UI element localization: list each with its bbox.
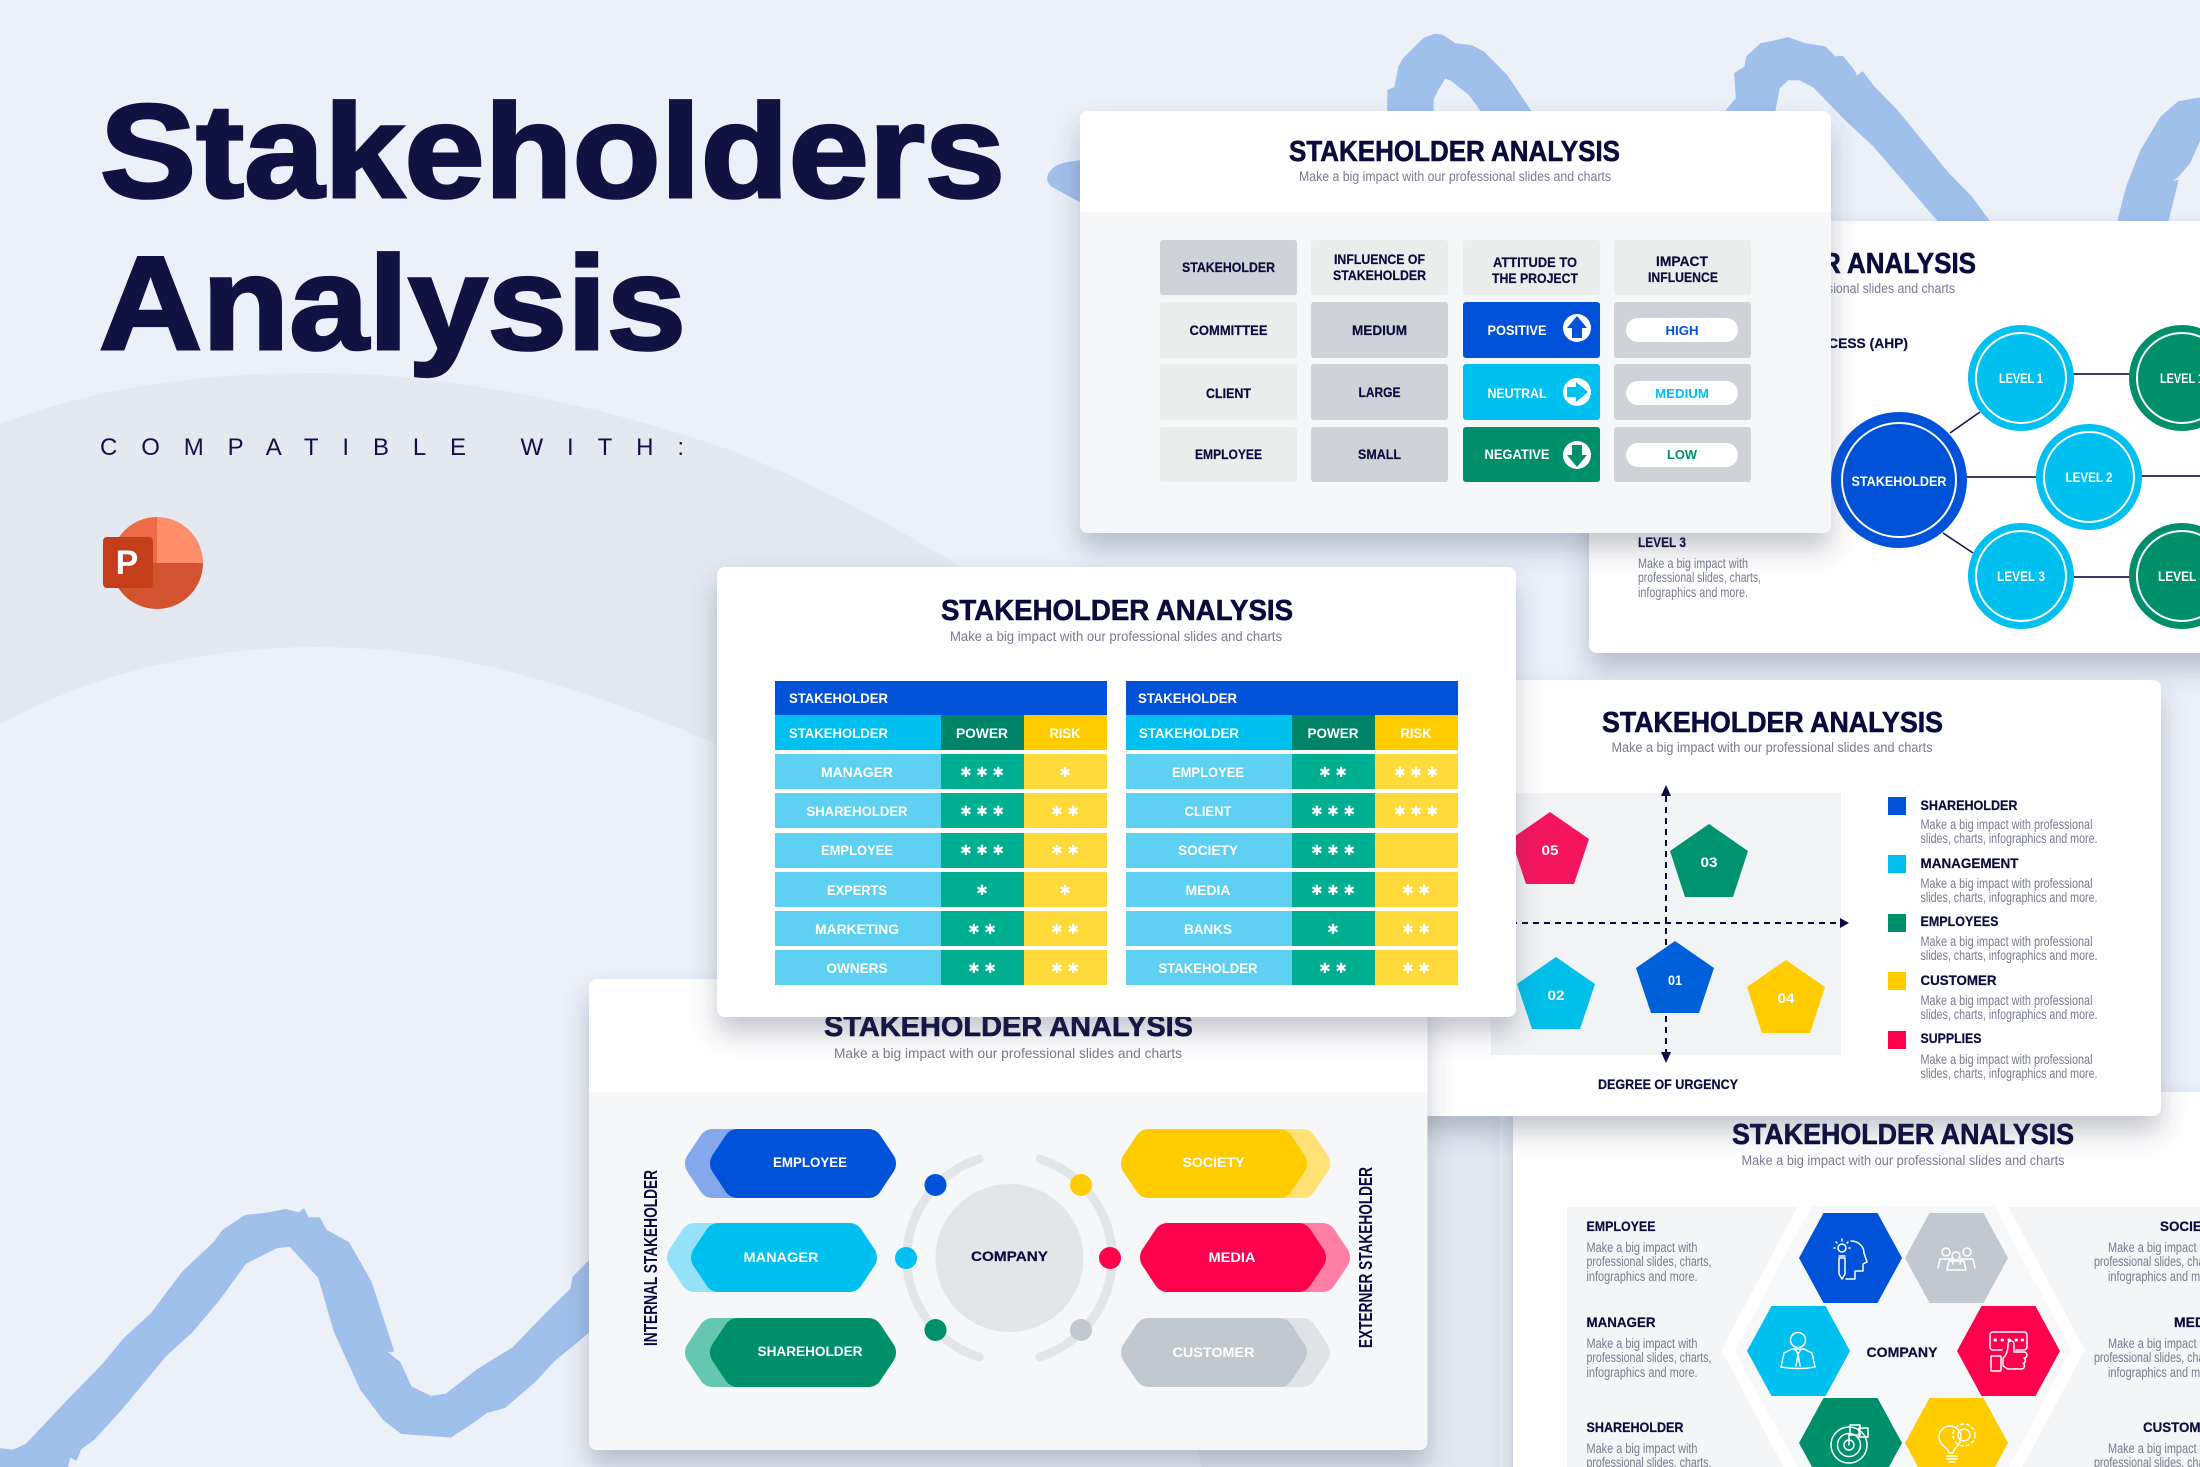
icon: up arrow — [1563, 314, 1591, 342]
panel: urgency matrix slide — [1380, 680, 2161, 1116]
legend: shareholder: slides, charts, infographics and more. — [1920, 831, 2098, 846]
icon: PowerPoint logo: P — [116, 544, 138, 582]
cell labels: STAKEHOLDER — [1182, 259, 1275, 275]
chevron: customer — [1136, 1333, 1315, 1372]
text block: manager: MANAGER — [1586, 1314, 1656, 1330]
legend: management: MANAGEMENT — [1920, 855, 2019, 871]
table: right: ✱ ✱ ✱ — [1311, 843, 1355, 859]
text block: employee: infographics and more. — [1586, 1269, 1698, 1284]
heading: Stakeholders Analysis — [99, 78, 1005, 378]
ring dots — [895, 1174, 1121, 1341]
table: left: OWNERS — [826, 960, 888, 976]
slide subtitle: Make a big impact with our professional slides and charts — [834, 1046, 1182, 1061]
pill: medium: MEDIUM — [1655, 386, 1709, 401]
cell labels: INFLUENCE OF — [1334, 251, 1425, 267]
table: right: RISK — [1400, 725, 1432, 741]
cell labels: POSITIVE — [1488, 322, 1546, 338]
text block: manager: Make a big impact with — [1586, 1336, 1698, 1351]
cell labels: THE PROJECT — [1492, 270, 1578, 286]
table: right: STAKEHOLDER — [1158, 960, 1258, 976]
legend: employees — [1888, 913, 2098, 963]
icon: businessman — [1781, 1332, 1815, 1368]
chevron: employee — [700, 1144, 881, 1183]
legend: management — [1888, 855, 2098, 905]
vertical label: internal: INTERNAL STAKEHOLDER — [641, 1170, 661, 1346]
panel: hexagon slide — [1513, 1092, 2200, 1467]
legend: customer: Make a big impact with professional — [1920, 993, 2092, 1008]
pentagon 02: 02 — [1548, 987, 1565, 1003]
table: right: ✱ ✱ — [1319, 961, 1347, 977]
slide subtitle: Make a big impact with our professional slides and charts — [1299, 169, 1611, 184]
node: lower green level — [2129, 523, 2200, 629]
table: left: ✱ ✱ — [968, 961, 996, 977]
chevron: shareholder: SHAREHOLDER — [758, 1343, 862, 1359]
hexagon: manager — [1747, 1306, 1850, 1396]
hexagon: shareholder — [1799, 1398, 1902, 1467]
pill: medium — [1626, 381, 1738, 405]
table: right: MEDIA — [1186, 882, 1230, 898]
table: right: SOCIETY — [1178, 842, 1239, 858]
table: left: SHAREHOLDER — [806, 803, 908, 819]
slide subtitle: Make a big impact with our professional slides and charts — [950, 629, 1282, 644]
level 3 text block: Make a big impact with — [1638, 556, 1748, 571]
center label: COMPANY — [1866, 1344, 1938, 1360]
node: level 3: LEVEL 3 — [1997, 568, 2045, 584]
table: right: ✱ ✱ ✱ — [1394, 765, 1438, 781]
table: right: ✱ ✱ ✱ — [1394, 804, 1438, 820]
pill: low: LOW — [1667, 447, 1698, 462]
legend: employees: slides, charts, infographics and more. — [1920, 948, 2098, 963]
table: right: POWER — [1308, 725, 1358, 741]
panel: power and risk tables slide — [717, 567, 1516, 1017]
legend: supplies: Make a big impact with professional — [1920, 1052, 2092, 1067]
slide title: STAKEHOLDER ANALYSIS — [1645, 248, 1976, 280]
node: upper green level — [2129, 325, 2200, 431]
table: left: ✱ — [1059, 883, 1071, 899]
pentagon 04: 04 — [1778, 990, 1795, 1006]
table: left: STAKEHOLDER — [789, 690, 888, 706]
pill: high — [1626, 318, 1738, 342]
cell labels: IMPACT — [1656, 253, 1708, 269]
icon: bulb and gears — [1939, 1424, 1975, 1462]
node: level 2: LEVEL 2 — [2066, 469, 2113, 485]
table: right: ✱ ✱ — [1402, 961, 1430, 977]
icon: head and pencil — [1834, 1239, 1867, 1279]
brush stroke: top right — [1048, 34, 2200, 227]
compatible with label: COMPATIBLE WITH: — [100, 434, 684, 461]
table: right: EMPLOYEE — [1172, 764, 1244, 780]
legend: customer: CUSTOMER — [1920, 972, 1996, 988]
pentagon 05 — [1511, 812, 1589, 884]
cell labels: NEUTRAL — [1488, 385, 1547, 401]
cell labels: INFLUENCE — [1648, 269, 1718, 285]
legend: shareholder — [1888, 797, 2098, 846]
level 3 text block: LEVEL 3 — [1638, 534, 1686, 550]
process heading: ANALYTIC HIERARCHY PROCESS (AHP) — [1640, 335, 1908, 351]
cell labels: LARGE — [1358, 384, 1400, 400]
table: left: POWER — [956, 725, 1008, 741]
cell grid — [1160, 240, 1751, 482]
table: right: ✱ ✱ — [1402, 922, 1430, 938]
cell labels: ATTITUDE TO — [1493, 254, 1577, 270]
table: left: MARKETING — [815, 921, 899, 937]
legend: management: Make a big impact with professional — [1920, 876, 2092, 891]
table: left: ✱ ✱ ✱ — [960, 804, 1004, 820]
table: left: ✱ — [976, 883, 988, 899]
cell labels: SMALL — [1358, 446, 1401, 462]
node: stakeholder — [1831, 412, 1967, 548]
table: left: ✱ ✱ ✱ — [960, 843, 1004, 859]
table: right: ✱ ✱ ✱ — [1311, 804, 1355, 820]
axis label: DEGREE OF URGENCY — [1598, 1076, 1739, 1092]
slide title: STAKEHOLDER ANALYSIS — [824, 1011, 1193, 1043]
table: left: EXPERTS — [827, 882, 887, 898]
table: left — [775, 681, 1107, 985]
brush stroke: bottom left — [0, 1210, 598, 1467]
level 3 text block: infographics and more. — [1638, 585, 1748, 600]
icon: right arrow — [1563, 378, 1591, 406]
table: right: ✱ ✱ ✱ — [1311, 883, 1355, 899]
cell labels: NEGATIVE — [1484, 446, 1550, 462]
panel: internal and external stakeholder slide — [589, 979, 1428, 1450]
text block: employee — [1586, 1218, 1712, 1284]
text block: manager — [1586, 1314, 1712, 1380]
node: stakeholder: STAKEHOLDER — [1852, 473, 1946, 489]
chevron: society: SOCIETY — [1182, 1154, 1245, 1170]
chevron: manager: MANAGER — [744, 1249, 818, 1265]
pill: low — [1626, 443, 1738, 467]
chevron: shareholder — [700, 1333, 881, 1372]
legend: shareholder: Make a big impact with professional — [1920, 817, 2092, 832]
panel: attitude table slide — [1080, 111, 1831, 533]
hexagon: media — [1957, 1306, 2060, 1396]
slide title: STAKEHOLDER ANALYSIS — [941, 595, 1293, 627]
chevron: society — [1136, 1144, 1315, 1183]
icon: PowerPoint logo — [103, 517, 203, 609]
cell labels: MEDIUM — [1352, 322, 1407, 338]
panel: level hierarchy slide — [1589, 221, 2200, 653]
table: left: EMPLOYEE — [821, 842, 893, 858]
pentagon 01: 01 — [1668, 972, 1682, 988]
cell labels: CLIENT — [1206, 385, 1251, 401]
text block: employee: professional slides, charts, — [1586, 1254, 1712, 1269]
node: level 3 — [1968, 523, 2074, 629]
slide title: STAKEHOLDER ANALYSIS — [1602, 707, 1943, 739]
pentagon 03 — [1670, 824, 1748, 897]
text block: society — [2094, 1218, 2200, 1284]
table: left: ✱ — [1059, 765, 1071, 781]
hexagon: employee — [1799, 1213, 1902, 1303]
legend: supplies — [1888, 1030, 2098, 1081]
pentagon 03: 03 — [1700, 854, 1718, 870]
icon: down arrow — [1563, 441, 1591, 469]
text block: customer — [2094, 1419, 2200, 1467]
pentagon 01 — [1636, 941, 1714, 1013]
table: left: ✱ ✱ — [1051, 922, 1079, 938]
legend: customer — [1888, 972, 2098, 1022]
cell labels — [1182, 251, 1718, 462]
hexagon: customer — [1905, 1398, 2008, 1467]
pentagon 04 — [1747, 960, 1825, 1033]
legend: employees: Make a big impact with professional — [1920, 934, 2092, 949]
legend: supplies: slides, charts, infographics and more. — [1920, 1066, 2098, 1081]
table: left: MANAGER — [821, 764, 893, 780]
legend: management: slides, charts, infographics and more. — [1920, 890, 2098, 905]
heading: Stakeholders Analysis: Analysis — [99, 230, 686, 378]
table: left: ✱ ✱ — [968, 922, 996, 938]
legend: supplies: SUPPLIES — [1920, 1030, 1982, 1046]
slide title: STAKEHOLDER ANALYSIS — [1732, 1119, 2074, 1151]
text block: media — [2094, 1314, 2200, 1380]
table: right: STAKEHOLDER — [1139, 725, 1239, 741]
legend: shareholder: SHAREHOLDER — [1920, 797, 2018, 813]
hexagon: society — [1905, 1213, 2008, 1303]
connector lines — [1943, 374, 2200, 577]
chevron: employee: EMPLOYEE — [773, 1154, 847, 1170]
icon: team — [1938, 1248, 1975, 1270]
table: left: RISK — [1050, 725, 1080, 741]
table: right: CLIENT — [1184, 803, 1232, 819]
pill: high: HIGH — [1666, 323, 1698, 338]
text block: shareholder: Make a big impact with — [1586, 1441, 1698, 1456]
axes with arrows — [1500, 785, 1849, 1063]
vertical label: external: EXTERNER STAKEHOLDER — [1356, 1167, 1376, 1348]
legend: customer: slides, charts, infographics and more. — [1920, 1007, 2098, 1022]
slide subtitle: Make a big impact with our professional slides and charts — [1612, 740, 1933, 755]
slide title: STAKEHOLDER ANALYSIS — [1289, 136, 1620, 168]
cell labels: STAKEHOLDER — [1333, 267, 1426, 283]
cell labels: COMMITTEE — [1190, 322, 1268, 338]
table: left: ✱ ✱ — [1051, 804, 1079, 820]
text block: shareholder — [1586, 1419, 1712, 1467]
table: left: ✱ ✱ ✱ — [960, 765, 1004, 781]
node: level 1: LEVEL 1 — [1999, 370, 2043, 386]
text block: shareholder: SHAREHOLDER — [1586, 1419, 1684, 1435]
chevron: manager — [682, 1238, 862, 1277]
level 3 text block — [1638, 534, 1761, 600]
table: right: ✱ ✱ — [1319, 765, 1347, 781]
legend: employees: EMPLOYEES — [1920, 913, 1998, 929]
center circle: company — [936, 1184, 1084, 1332]
icon: thumbs up rating — [1990, 1332, 2027, 1371]
table: right: BANKS — [1184, 921, 1232, 937]
table: right — [1126, 681, 1458, 985]
center circle: company: COMPANY — [971, 1248, 1049, 1264]
chevron: media — [1155, 1238, 1335, 1277]
icon: target — [1831, 1425, 1868, 1463]
cell labels: EMPLOYEE — [1195, 446, 1262, 462]
level 3 text block: professional slides, charts, — [1638, 570, 1761, 585]
ring arcs — [907, 1159, 1112, 1357]
node: level 1 — [1968, 325, 2074, 431]
pentagon 05: 05 — [1542, 842, 1559, 858]
pentagon 02 — [1517, 957, 1595, 1029]
node: level 2 — [2036, 424, 2142, 530]
table: right: ✱ ✱ — [1402, 883, 1430, 899]
chevron: media: MEDIA — [1208, 1249, 1256, 1265]
slide subtitle: Make a big impact with our professional slides and charts — [1742, 1153, 2065, 1168]
table: right: STAKEHOLDER — [1138, 690, 1237, 706]
table: left: ✱ ✱ — [1051, 843, 1079, 859]
chevron: customer: CUSTOMER — [1172, 1344, 1254, 1360]
heading: Stakeholders Analysis: Stakeholders — [100, 78, 1005, 226]
text block: manager: infographics and more. — [1586, 1365, 1698, 1380]
table: left: ✱ ✱ — [1051, 961, 1079, 977]
text block: employee: EMPLOYEE — [1586, 1218, 1656, 1234]
table: right: ✱ — [1327, 922, 1339, 938]
table: left: STAKEHOLDER — [789, 725, 888, 741]
text block: employee: Make a big impact with — [1586, 1240, 1698, 1255]
slide subtitle: Make a big impact with our professional slides and charts — [1643, 281, 1955, 296]
text block: manager: professional slides, charts, — [1586, 1350, 1712, 1365]
